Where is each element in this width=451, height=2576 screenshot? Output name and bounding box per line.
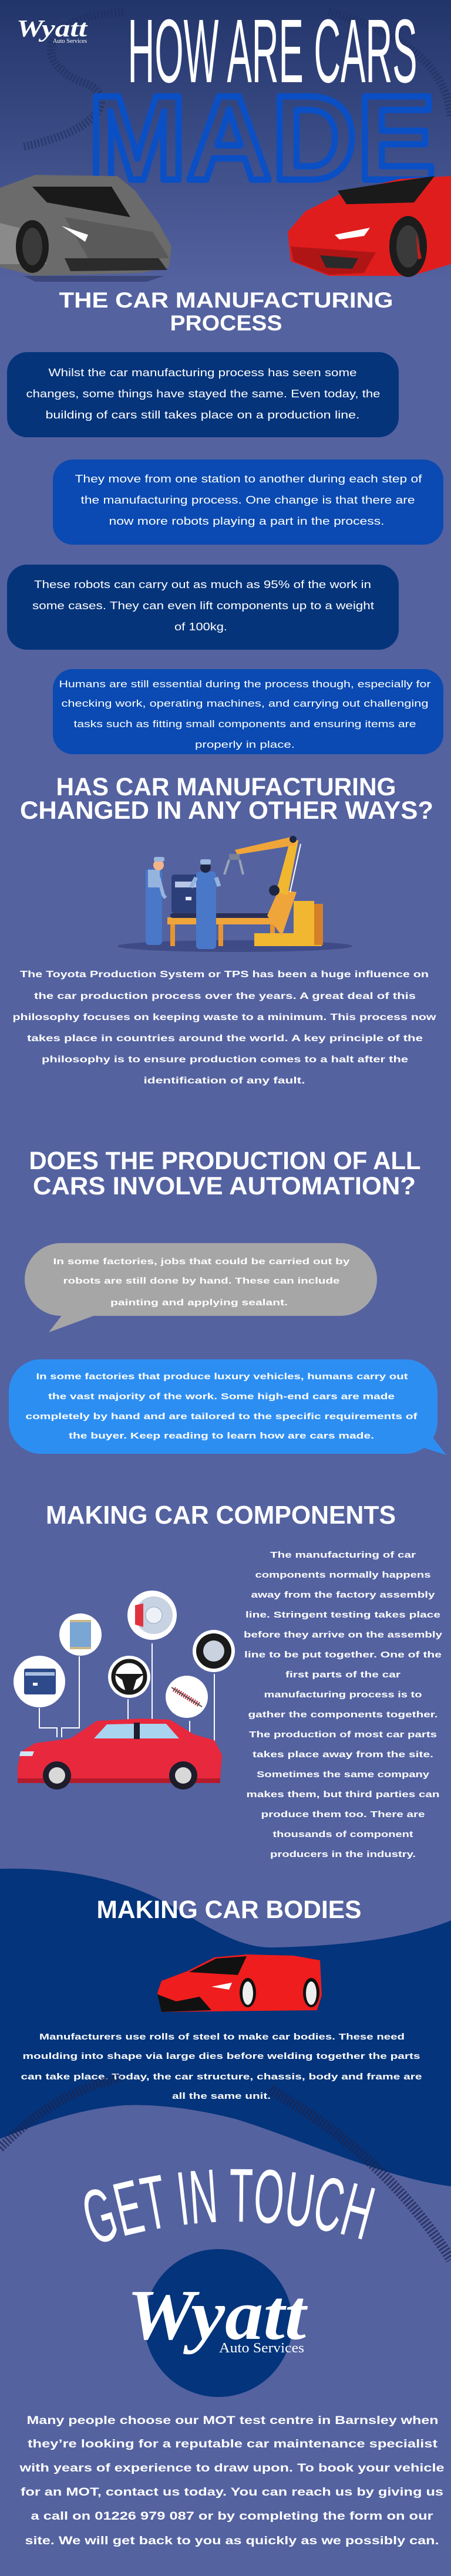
- paragraph: components text: thousands of component: [272, 1829, 413, 1839]
- paragraph: components text: line to be put together. One of the: [244, 1650, 442, 1660]
- heading: the car manufacturing process: THE CAR MANUFACTURING: [59, 288, 393, 312]
- paragraph: contact text: with years of experience to draw upon. To book your vehicle: [19, 2462, 445, 2474]
- decorative tyre tracks top: [23, 12, 451, 147]
- paragraph: contact text: Many people choose our MOT test centre in Barnsley when: [27, 2415, 438, 2427]
- paragraph: components text: produce them too. There are: [261, 1809, 425, 1819]
- text box 3: These robots can carry out as much as 95% of the work in: [34, 579, 371, 590]
- paragraph: car bodies text: moulding into shape via large dies before welding together the parts: [22, 2051, 420, 2061]
- paragraph: components text: components normally happens: [255, 1570, 431, 1580]
- illustration: red sports car: [157, 1954, 322, 2012]
- decorative tyre tracks bottom: [0, 2078, 451, 2260]
- text box 4: checking work, operating machines, and carrying out challenging: [61, 698, 429, 709]
- speech bubble: grey: [25, 1243, 377, 1332]
- speech bubble: blue: completely by hand and are tailored to the specific requirements of: [26, 1412, 418, 1422]
- paragraph: components text: before they arrive on the assembly: [244, 1630, 443, 1640]
- text box 2: the manufacturing process. One change is that there are: [81, 494, 415, 506]
- paragraph: contact text: site. We will get back to you as quickly as we possibly can.: [25, 2535, 439, 2547]
- paragraph: toyota production system: takes place in countries around the world. A key principle of the: [27, 1034, 423, 1044]
- paragraph: components text: [244, 1550, 443, 1859]
- heading: does production involve automation: CARS INVOLVE AUTOMATION?: [33, 1172, 416, 1200]
- paragraph: components text: producers in the industry.: [270, 1849, 416, 1859]
- title: MADE outlined: MADE: [88, 70, 436, 205]
- text box 1: changes, some things have stayed the same. Even today, the: [26, 388, 381, 400]
- heading: does production involve automation: DOES THE PRODUCTION OF ALL: [29, 1147, 420, 1175]
- paragraph: car bodies text: Manufacturers use rolls of steel to make car bodies. These need: [39, 2032, 405, 2042]
- speech bubble: blue: In some factories that produce luxury vehicles, humans carry out: [36, 1372, 408, 1382]
- logo: Wyatt top: Auto Services: [53, 38, 87, 45]
- text box 1: [7, 352, 399, 437]
- panel: navy wave band: [0, 1869, 451, 2186]
- paragraph: contact text: they’re looking for a reputable car maintenance specialist: [28, 2438, 438, 2450]
- paragraph: components text: Sometimes the same company: [257, 1770, 430, 1780]
- logo: Wyatt footer in navy circle: Auto Services: [219, 2341, 304, 2356]
- speech bubble: blue: the buyer. Keep reading to learn how are cars made.: [69, 1431, 374, 1441]
- text box 4: properly in place.: [195, 739, 295, 750]
- illustration: red sports car: [288, 176, 451, 277]
- paragraph: components text: The production of most car parts: [249, 1730, 437, 1740]
- paragraph: toyota production system: philosophy is to ensure production comes to a halt after the: [42, 1055, 408, 1065]
- paragraph: car bodies text: [21, 2032, 422, 2101]
- speech bubble: grey: painting and applying sealant.: [110, 1298, 288, 1308]
- speech bubble: blue: the vast majority of the work. Some high-end cars are made: [48, 1392, 395, 1402]
- paragraph: toyota production system: [13, 970, 436, 1086]
- logo: Wyatt footer in navy circle: [127, 2249, 308, 2397]
- heading: making car components: MAKING CAR COMPONENTS: [46, 1501, 396, 1530]
- text box 3: [7, 565, 399, 650]
- text box 4: [53, 669, 443, 754]
- paragraph: components text: first parts of the car: [285, 1670, 400, 1680]
- paragraph: toyota production system: the car production process over the years. A great deal of this: [34, 991, 416, 1001]
- paragraph: toyota production system: philosophy focuses on keeping waste to a minimum. This process now: [13, 1012, 436, 1022]
- paragraph: toyota production system: identification of any fault.: [143, 1076, 305, 1086]
- text box 2: now more robots playing a part in the process.: [109, 515, 384, 527]
- text box 1: building of cars still takes place on a production line.: [46, 409, 359, 421]
- paragraph: components text: makes them, but third parties can: [247, 1790, 439, 1800]
- paragraph: toyota production system: The Toyota Production System or TPS has been a huge influence on: [20, 970, 429, 980]
- heading: making car bodies: MAKING CAR BODIES: [96, 1896, 362, 1924]
- logo: Wyatt top: Wyatt: [16, 15, 88, 42]
- paragraph: components text: gather the components together.: [248, 1710, 438, 1720]
- paragraph: contact text: a call on 01226 979 087 or by completing the form on our: [31, 2510, 433, 2523]
- paragraph: car bodies text: all the same unit.: [172, 2091, 271, 2101]
- header background: [0, 0, 451, 282]
- heading: get in touch: GET IN TOUCH: [85, 2169, 375, 2242]
- paragraph: components text: away from the factory assembly: [251, 1590, 435, 1600]
- heading: the car manufacturing process: PROCESS: [170, 311, 282, 335]
- paragraph: components text: manufacturing process is to: [264, 1690, 422, 1700]
- heading: the car manufacturing process: [59, 288, 393, 335]
- text box 3: some cases. They can even lift components up to a weight: [32, 600, 374, 612]
- text box 2: [53, 460, 443, 545]
- text box 3: of 100kg.: [174, 621, 227, 633]
- paragraph: contact text: [19, 2415, 445, 2547]
- text box 4: tasks such as fitting small components and ensuring items are: [74, 718, 416, 730]
- speech bubble: grey: robots are still done by hand. These can include: [63, 1276, 339, 1286]
- speech bubble: blue: [9, 1359, 446, 1455]
- paragraph: components text: The manufacturing of car: [270, 1550, 416, 1560]
- paragraph: components text: line. Stringent testing takes place: [245, 1610, 440, 1620]
- speech bubble: grey: In some factories, jobs that could be carried out by: [53, 1257, 350, 1267]
- logo: Wyatt footer in navy circle: Wyatt: [127, 2275, 308, 2355]
- text box 4: Humans are still essential during the process though, especially for: [59, 678, 431, 690]
- text box 2: They move from one station to another during each step of: [75, 473, 423, 485]
- paragraph: car bodies text: can take place. Today, the car structure, chassis, body and frame are: [21, 2072, 422, 2082]
- illustration: car with component callouts: [14, 1591, 235, 1790]
- illustration: grey sports car: [0, 175, 171, 282]
- heading: has car manufacturing changed: HAS CAR MANUFACTURING: [56, 773, 396, 801]
- paragraph: components text: takes place away from the site.: [253, 1750, 433, 1760]
- illustration: factory workers and robot arm: [117, 836, 352, 952]
- text box 1: Whilst the car manufacturing process has seen some: [48, 367, 357, 379]
- heading: has car manufacturing changed: CHANGED IN ANY OTHER WAYS?: [20, 796, 433, 825]
- heading: has car manufacturing changed: [20, 773, 433, 825]
- heading: does production involve automation: [29, 1147, 420, 1200]
- paragraph: contact text: for an MOT, contact us today. You can reach us by giving us: [21, 2486, 443, 2499]
